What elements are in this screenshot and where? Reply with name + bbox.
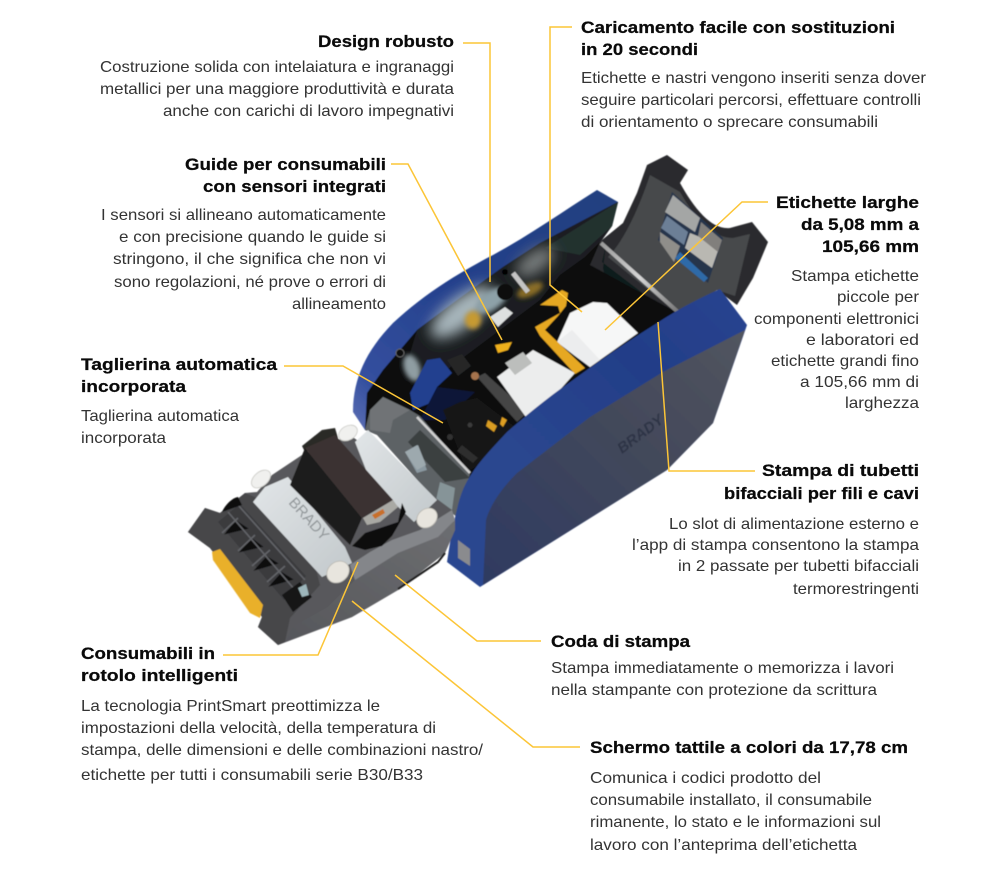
white label block: [497, 350, 575, 420]
tray side wall: [278, 520, 455, 645]
text block: taglierina automatica: Taglierina automatica: [81, 355, 278, 374]
gray drum and floor: [365, 397, 470, 517]
text block: design robusto: anche con carichi di lavoro impegnativi: [163, 103, 454, 120]
text block: consumabili in rotolo: stampa, delle dimensioni e delle combinazioni nastro/: [81, 742, 484, 759]
steel rod front: [417, 417, 470, 473]
text block: etichette larghe: Stampa etichette: [791, 268, 919, 285]
text block: consumabili in rotolo: La tecnologia PrintSmart preottimizza le: [81, 698, 380, 715]
leader line: schermo tattile: [352, 601, 580, 747]
text block: coda di stampa: [551, 632, 894, 699]
text block: stampa di tubetti: l’app di stampa consentono la stampa: [632, 537, 919, 554]
leader line: guide per consumabili: [391, 164, 502, 340]
text block: guide per consumabili: allineamento: [292, 296, 386, 313]
text block: stampa di tubetti: [632, 461, 919, 598]
front slate side panel: [483, 330, 745, 585]
text block: design robusto: Costruzione solida con intelaiatura e ingranaggi: [100, 59, 454, 76]
small mechanism in tray corner: [282, 582, 312, 612]
text block: caricamento facile: Etichette e nastri vengono inseriti senza dover: [581, 70, 927, 87]
text block: stampa di tubetti: termorestringenti: [793, 581, 919, 598]
interior of the printer: [365, 202, 680, 517]
text block: schermo tattile: consumabile installato, il consumabile: [590, 792, 872, 809]
text block: consumabili in rotolo: impostazioni della velocità, della temperatura di: [81, 720, 436, 737]
text block: taglierina automatica: [81, 355, 278, 447]
leader line: consumabili in rotolo: [223, 562, 358, 655]
latch on shell: [458, 540, 470, 566]
blue inner part: [410, 358, 452, 410]
text block: taglierina automatica: Taglierina automatica: [81, 408, 239, 425]
text block: etichette larghe: Etichette larghe: [776, 193, 919, 212]
ribbon roll right: [355, 430, 437, 522]
text block: taglierina automatica: incorporata: [81, 377, 187, 396]
wall brackets: [490, 307, 513, 327]
text block: consumabili in rotolo: etichette per tutti i consumabili serie B30/B33: [81, 767, 423, 784]
black print head: [290, 428, 406, 550]
text block: caricamento facile: di orientamento o sprecare consumabili: [581, 114, 878, 131]
metal wall: [405, 202, 618, 375]
text block: schermo tattile: Schermo tattile a colori da 17,78 cm: [590, 738, 908, 757]
gray roller: [477, 373, 528, 422]
text block: etichette larghe: a 105,66 mm di: [800, 374, 919, 391]
text block: guide per consumabili: sono regolazioni, né prove o errori di: [114, 274, 386, 291]
text block: coda di stampa: Stampa immediatamente o memorizza i lavori: [551, 660, 894, 677]
text block: schermo tattile: [590, 738, 908, 854]
leader line: caricamento facile: [550, 27, 582, 312]
text block: coda di stampa: nella stampante con protezione da scrittura: [551, 682, 877, 699]
text block: taglierina automatica: incorporata: [81, 430, 166, 447]
text block: etichette larghe: componenti elettronici: [754, 311, 919, 328]
text block: design robusto: Design robusto: [318, 32, 454, 51]
white label roll: [557, 302, 638, 367]
text block: consumabili in rotolo: [81, 644, 484, 784]
text block: stampa di tubetti: in 2 passate per tubetti bifacciali: [678, 558, 919, 575]
leader line: design robusto: [463, 43, 490, 282]
text block: caricamento facile: [581, 18, 927, 131]
text block: consumabili in rotolo: Consumabili in: [81, 644, 215, 663]
text block: guide per consumabili: e con precisione quando le guide si: [119, 229, 386, 246]
pull-out tray: [188, 422, 455, 645]
text block: etichette larghe: larghezza: [845, 395, 919, 412]
leader line: stampa di tubetti: [658, 322, 755, 471]
grille end block: [188, 493, 320, 645]
text block: stampa di tubetti: bifacciali per fili e cavi: [724, 484, 919, 503]
text block: etichette larghe: e laboratori ed: [806, 332, 919, 349]
text block: stampa di tubetti: Lo slot di alimentazione esterno e: [669, 516, 919, 533]
text block: consumabili in rotolo: rotolo intelligenti: [81, 666, 238, 685]
logo on the shell: BRADY: [614, 410, 669, 457]
front blue shell: [447, 289, 747, 587]
text block: etichette larghe: 105,66 mm: [822, 237, 919, 256]
rear steel rod: [601, 243, 678, 312]
ribbon roll left: [253, 477, 352, 577]
text block: schermo tattile: rimanente, lo stato e le informazioni sul: [590, 814, 881, 831]
rear blue shell: [353, 190, 618, 440]
text block: design robusto: [100, 32, 454, 120]
text block: guide per consumabili: stringono, il che significa che non vi: [113, 251, 386, 268]
text block: guide per consumabili: I sensori si allineano automaticamente: [101, 207, 386, 224]
pull-out tray: BRADY: [285, 494, 332, 544]
leader line: etichette larghe: [605, 202, 768, 330]
text block: caricamento facile: Caricamento facile con sostituzioni: [581, 18, 895, 37]
text block: etichette larghe: da 5,08 mm a: [801, 215, 920, 234]
leader line: taglierina automatica: [284, 366, 443, 423]
text block: guide per consumabili: Guide per consumabili: [185, 155, 386, 174]
text block: schermo tattile: lavoro con l’anteprima dell’etichetta: [590, 837, 857, 854]
yellow knob: [495, 342, 512, 353]
text block: etichette larghe: piccole per: [837, 289, 920, 306]
text block: etichette larghe: etichette grandi fino: [771, 353, 919, 370]
tray rim: [350, 510, 455, 580]
yellow media guide: [535, 290, 585, 374]
text block: guide per consumabili: [101, 155, 386, 313]
text block: caricamento facile: in 20 secondi: [581, 40, 698, 59]
text block: guide per consumabili: con sensori integrati: [203, 177, 386, 196]
leader line: coda di stampa: [395, 575, 541, 641]
black circuit area: [443, 398, 515, 472]
rear cover with instruction sticker: [585, 155, 768, 335]
text block: design robusto: metallici per una maggiore produttività e durata: [100, 81, 454, 98]
text block: stampa di tubetti: Stampa di tubetti: [762, 461, 919, 480]
text block: schermo tattile: Comunica i codici prodotto del: [590, 770, 821, 787]
text block: etichette larghe: [754, 193, 920, 412]
text block: caricamento facile: seguire particolari percorsi, effettuare controlli: [581, 92, 921, 109]
text block: coda di stampa: Coda di stampa: [551, 632, 691, 651]
yellow handle: [212, 549, 263, 618]
sticker: [658, 192, 723, 283]
printer illustration: [188, 155, 768, 645]
